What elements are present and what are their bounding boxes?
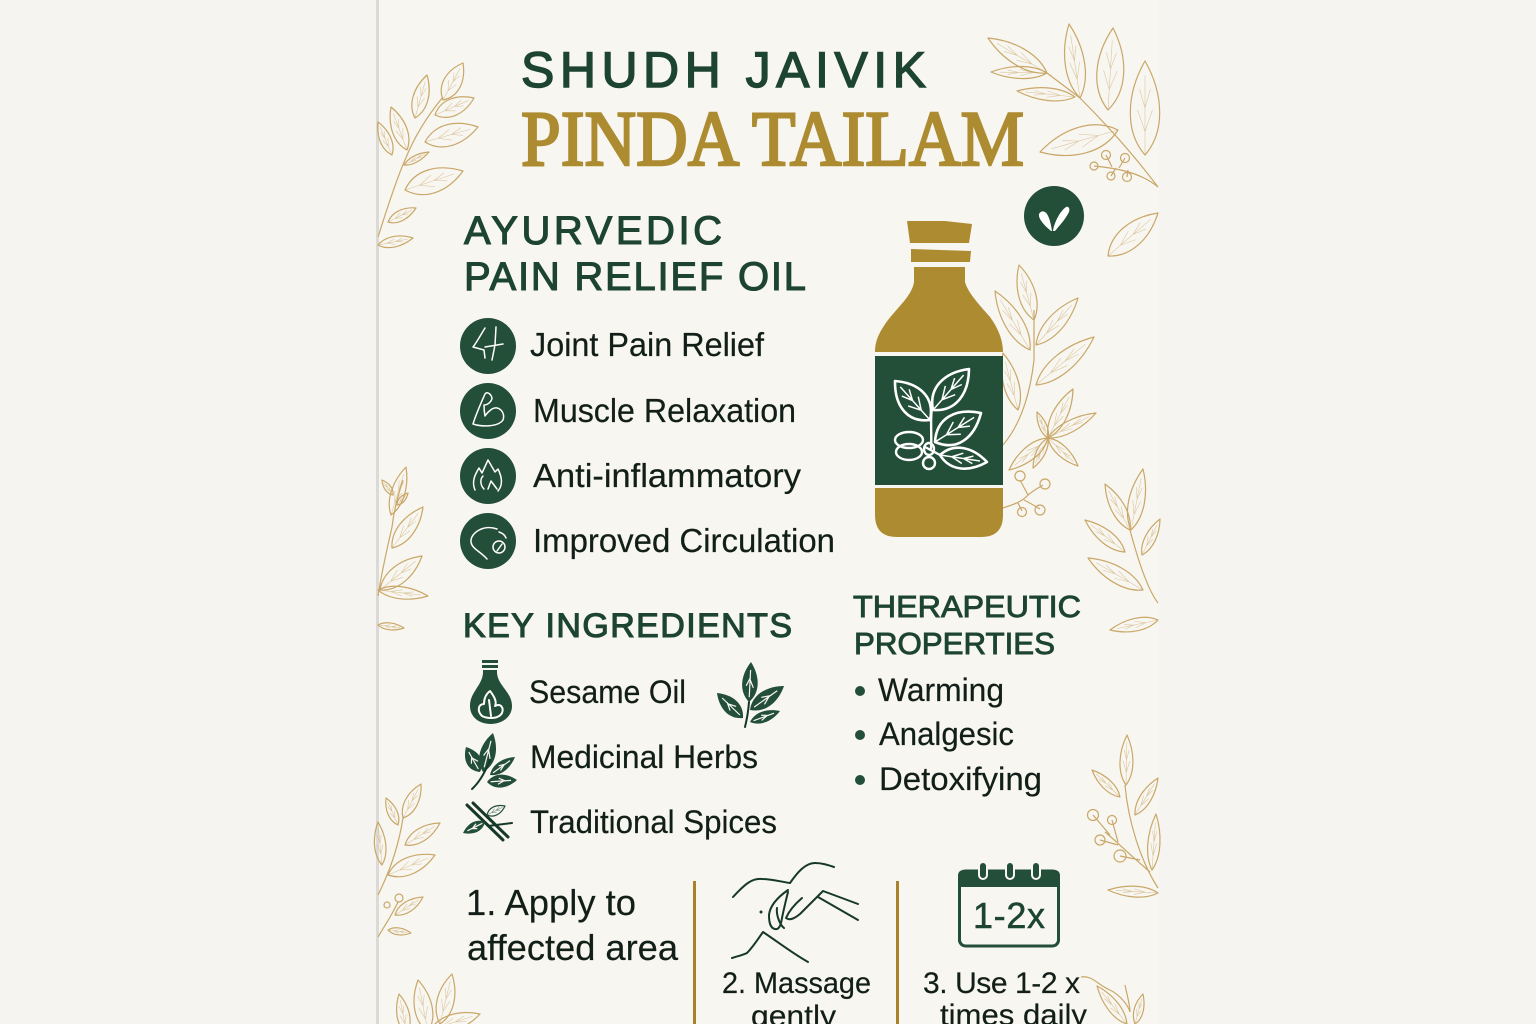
decorative leaves: left middle sprig [374,465,429,631]
step 1 text: 1. Apply to [466,882,636,923]
ingredient: sesame oil [470,660,686,724]
heading: therapeutic properties: PROPERTIES [854,626,1055,661]
poster sheet [376,0,1159,1024]
icon: herb sprig [712,662,789,727]
list: warming: Warming [878,672,1004,708]
decorative leaves: right lower sprig [1088,735,1163,898]
title: SHUDH JAIVIK [521,42,926,98]
benefit: improved circulation: Improved Circulation [533,522,835,559]
title [521,42,1024,182]
heading: therapeutic properties [853,589,1081,661]
benefit: joint pain relief [460,318,765,374]
icon: massage hand [732,863,858,962]
ingredient: medicinal herbs [460,731,758,789]
benefit: anti-inflammatory: Anti-inflammatory [533,457,802,494]
heading: ayurvedic pain relief oil: PAIN RELIEF OIL [464,255,806,299]
heading: key ingredients: KEY INGREDIENTS [463,607,792,645]
ingredient: sesame oil: Sesame Oil [529,674,686,710]
heading: therapeutic properties: THERAPEUTIC [853,589,1081,624]
decorative leaves: left lower sprigs [372,781,443,937]
list: analgesic: Analgesic [879,716,1014,752]
ingredient: traditional spices: Traditional Spices [530,804,777,840]
decorative leaves: bottom right [1081,977,1147,1024]
benefit: joint pain relief: Joint Pain Relief [530,326,765,363]
step 3 text: 3. Use 1-2 x [923,967,1080,1000]
benefit: muscle relaxation [460,383,796,439]
decorative leaves: top right sprig [983,23,1165,265]
benefit: anti-inflammatory [460,448,802,504]
step 2 text [722,967,871,1024]
heading: ayurvedic pain relief oil: AYURVEDIC [464,209,722,253]
decorative leaves: right middle sprig [1081,467,1165,636]
step 2 text: 2. Massage [722,967,871,1000]
benefit: muscle relaxation: Muscle Relaxation [533,392,796,429]
step 1 text: affected area [467,927,679,968]
icon: calendar 1-2x [958,862,1060,946]
title: PINDA TAILAM [521,95,1024,182]
bottle [875,221,1003,537]
bottle cap [907,221,972,243]
decorative leaves: bottom left [393,972,482,1024]
step 3 text [923,967,1087,1024]
step 1 text [466,882,679,968]
ingredient: medicinal herbs: Medicinal Herbs [530,739,758,775]
icon: check badge [1024,186,1084,246]
benefit: improved circulation [460,513,835,569]
list: detoxifying: Detoxifying [879,761,1042,797]
decorative leaves: top left sprig [373,59,481,250]
bottle label: leaves and seeds [885,360,989,472]
decorative leaves: sprig behind bottle [987,263,1100,516]
heading: ayurvedic pain relief oil [464,209,806,299]
icon: calendar 1-2x: 1-2x [973,895,1045,936]
